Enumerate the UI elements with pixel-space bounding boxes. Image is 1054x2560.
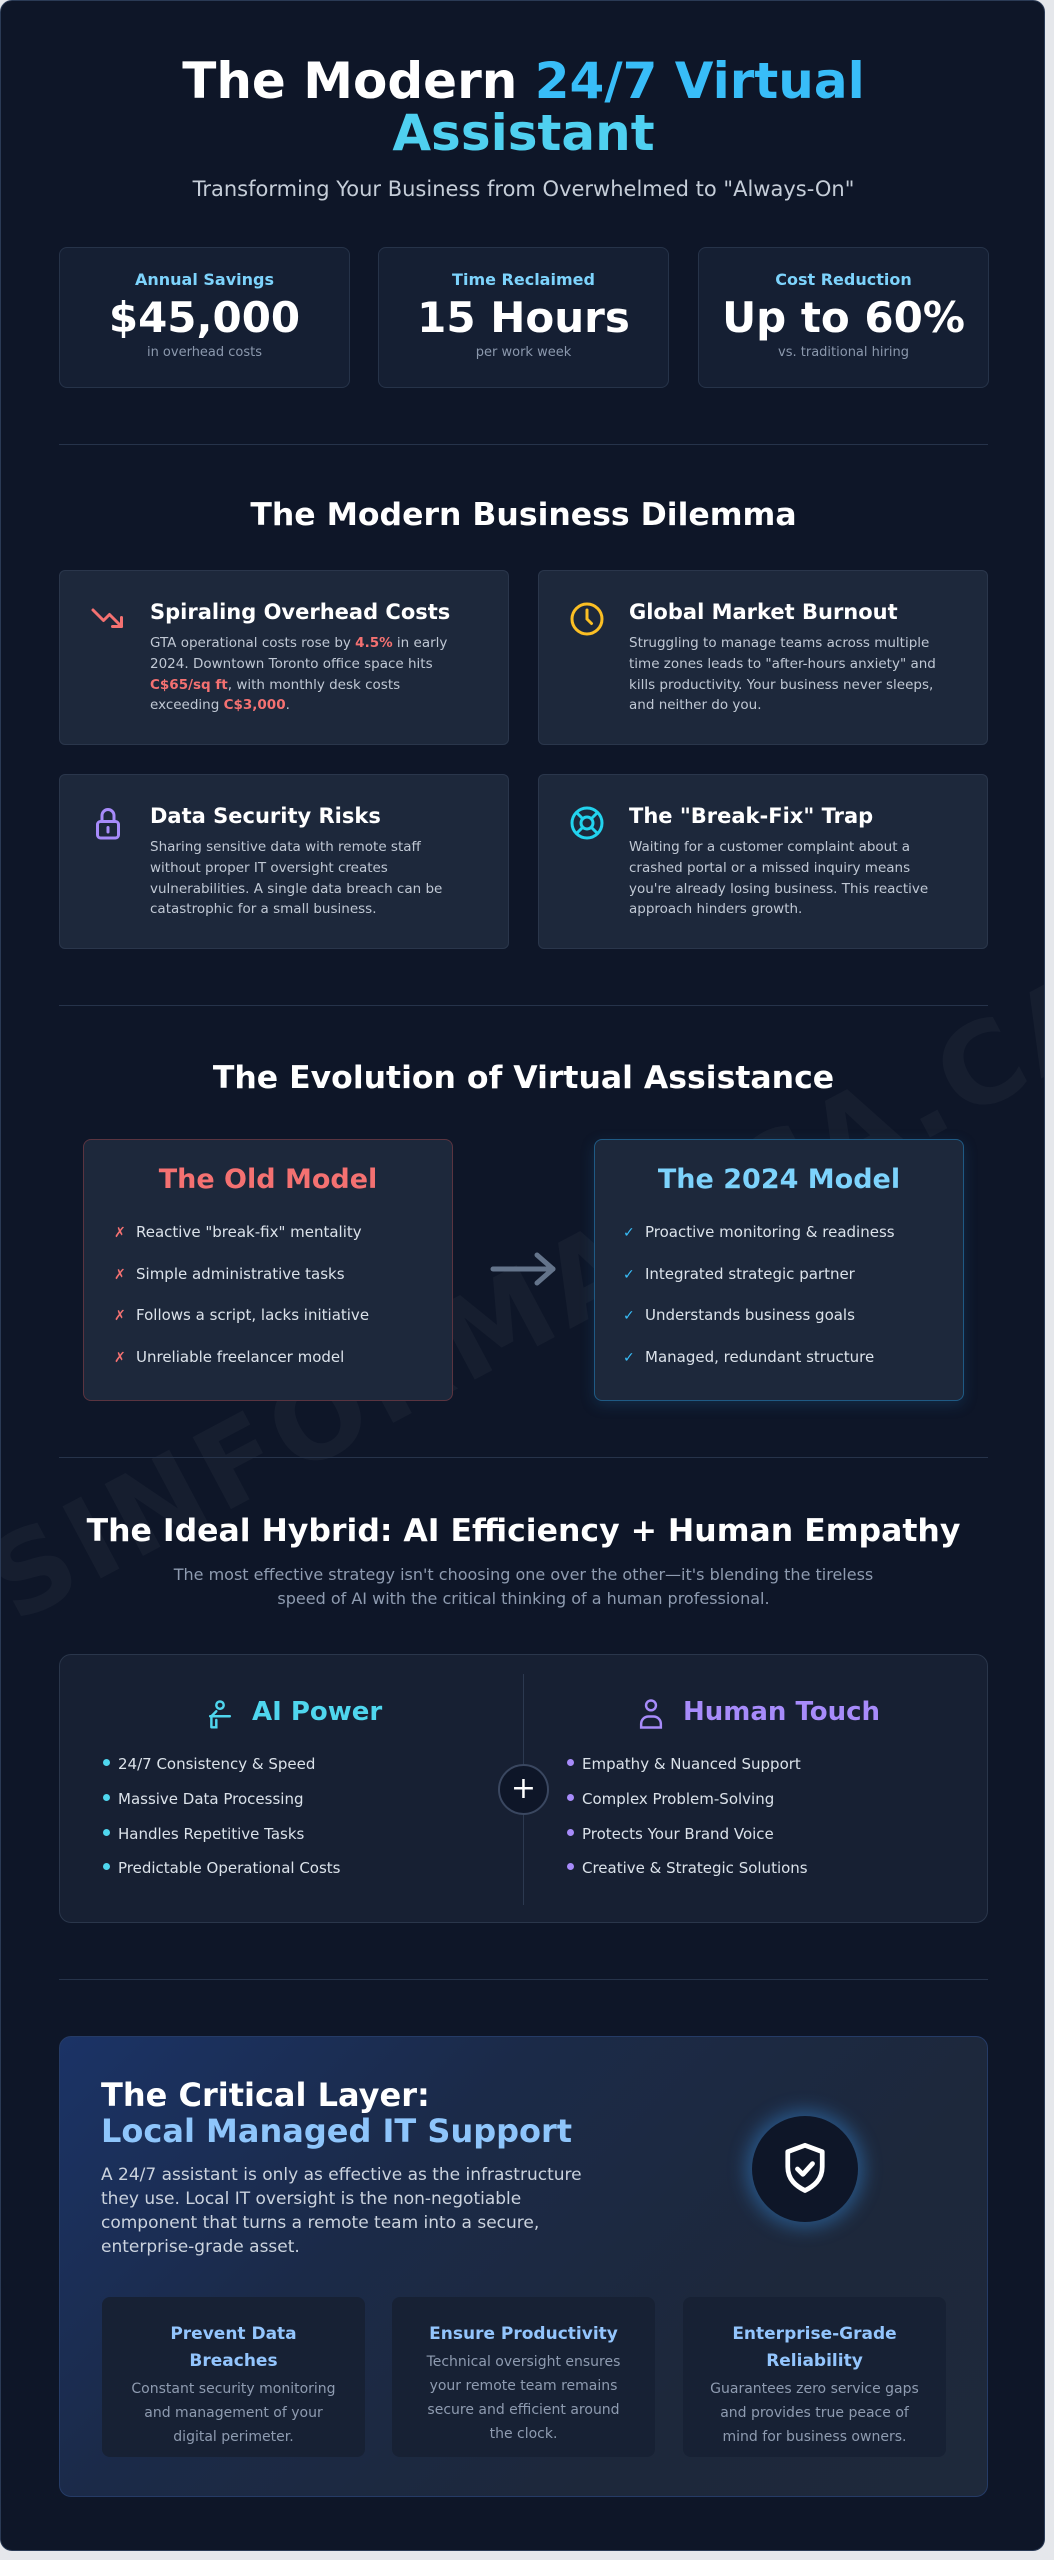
card: reliability (683, 2297, 946, 2457)
panel: burnout: Global Market Burnout (629, 600, 898, 624)
card: productivity (392, 2297, 655, 2457)
panel: hybrid comparison: Predictable Operational Costs (118, 1859, 340, 1877)
heading: hybrid: The Ideal Hybrid: AI Efficiency + Human Empathy (87, 1513, 960, 1549)
panel: hybrid comparison: Creative & Strategic Solutions (582, 1859, 808, 1877)
AI power title: AI Power (252, 1697, 382, 1727)
panel: security: Data Security Risks (150, 804, 381, 828)
card: productivity: Ensure Productivity (429, 2324, 618, 2344)
panel: overhead costs (59, 570, 509, 745)
panel: 2024 model: ✓ (623, 1225, 635, 1241)
card: prevent breaches: Prevent Data Breaches (170, 2324, 297, 2371)
card: prevent breaches (102, 2297, 365, 2457)
panel: break-fix: The "Break-Fix" Trap (629, 804, 873, 828)
stat: cost reduction: Cost Reduction (775, 270, 912, 289)
heading: dilemma: The Modern Business Dilemma (250, 497, 797, 533)
panel: 2024 model: Understands business goals (645, 1306, 855, 1324)
panel: 2024 model (594, 1139, 964, 1401)
stat: annual savings: in overhead costs (147, 345, 262, 360)
icon: life buoy (570, 806, 604, 840)
stat: annual savings: Annual Savings (135, 270, 274, 289)
panel: 2024 model: ✓ (623, 1308, 635, 1324)
critical text: A 24/7 assistant is only as effective as the infrastructure they use. Local IT oversight is the non-negotiable component that turns a remote team into a secure, enterprise-grade asset. (101, 2165, 582, 2257)
critical title (101, 2076, 572, 2150)
panel: 2024 model: The 2024 Model (658, 1164, 900, 1195)
critical title: The Critical Layer: (101, 2076, 430, 2114)
hybrid subtitle: speed of AI with the critical thinking of a human professional. (277, 1589, 770, 1608)
stat: annual savings: $45,000 (109, 293, 300, 342)
arrow (490, 1252, 556, 1286)
stat: time reclaimed (378, 247, 669, 388)
heading: evolution: The Evolution of Virtual Assistance (213, 1060, 834, 1096)
panel: 2024 model: ✓ (623, 1350, 635, 1366)
hybrid subtitle (174, 1565, 873, 1608)
panel: old model: Unreliable freelancer model (136, 1348, 344, 1366)
stat: time reclaimed: per work week (476, 345, 571, 360)
panel: 2024 model: Integrated strategic partner (645, 1265, 855, 1283)
panel: old model: ✗ (114, 1308, 126, 1324)
panel: hybrid comparison: Complex Problem-Solving (582, 1790, 774, 1808)
stat: cost reduction: vs. traditional hiring (778, 345, 909, 360)
panel: burnout (538, 570, 988, 745)
stat: time reclaimed: 15 Hours (417, 293, 630, 342)
panel: burnout: Struggling to manage teams across multiple time zones leads to "after-hours anxiety" and kills productivity. Your business never sleeps, and neither do you. (629, 635, 936, 713)
card: reliability: Guarantees zero service gaps and provides true peace of mind for business owners. (710, 2381, 919, 2445)
panel: old model (83, 1139, 453, 1401)
panel: old model: Reactive "break-fix" mentality (136, 1223, 362, 1241)
panel: 2024 model: Proactive monitoring & readiness (645, 1223, 895, 1241)
panel: old model: ✗ (114, 1267, 126, 1283)
card: productivity: Technical oversight ensures your remote team remains secure and efficient around the clock. (427, 2354, 620, 2442)
icon: lock (96, 808, 120, 840)
panel: security: Sharing sensitive data with remote staff without proper IT oversight creates vulnerabilities. A single data breach can be catastrophic for a small business. (150, 839, 442, 917)
panel: old model: ✗ (114, 1350, 126, 1366)
stat: time reclaimed: Time Reclaimed (452, 270, 595, 289)
panel: hybrid comparison: Protects Your Brand Voice (582, 1825, 774, 1843)
panel: hybrid comparison: Handles Repetitive Tasks (118, 1825, 304, 1843)
panel: overhead costs: GTA operational costs rose by 4.5% in early 2024. Downtown Toronto office space hits C$65/sq ft, with monthly desk costs exceeding C$3,000. (150, 635, 447, 713)
panel: hybrid comparison: 24/7 Consistency & Speed (118, 1755, 315, 1773)
panel: 2024 model: ✓ (623, 1267, 635, 1283)
icon: trending down (91, 608, 124, 628)
panel: hybrid comparison: Empathy & Nuanced Support (582, 1755, 801, 1773)
stat: cost reduction: Up to 60% (722, 293, 965, 342)
panel: critical layer (59, 2036, 988, 2497)
title (182, 52, 865, 162)
subtitle: Transforming Your Business from Overwhelmed to "Always-On" (193, 177, 854, 201)
card: prevent breaches: Constant security monitoring and management of your digital perimeter. (131, 2381, 336, 2445)
panel: break-fix: Waiting for a customer complaint about a crashed portal or a missed inquiry means you're already losing business. This reactive approach hinders growth. (629, 839, 928, 917)
panel: security (59, 774, 509, 949)
human touch title: Human Touch (683, 1697, 880, 1727)
stat: annual savings (59, 247, 350, 388)
panel: old model: The Old Model (159, 1164, 377, 1195)
card: reliability: Enterprise-Grade Reliability (732, 2324, 897, 2371)
panel: old model: Simple administrative tasks (136, 1265, 345, 1283)
icon: shield (752, 2116, 858, 2222)
title: Assistant (392, 104, 655, 162)
panel: hybrid comparison (59, 1654, 988, 1923)
icon: plus (498, 1764, 549, 1815)
title: The Modern 24/7 Virtual (182, 52, 865, 110)
icon: AI (208, 1700, 232, 1728)
icon: plus: + (511, 1771, 536, 1806)
panel: overhead costs: Spiraling Overhead Costs (150, 600, 450, 624)
icon: clock (570, 602, 604, 636)
stat: cost reduction (698, 247, 989, 388)
panel: old model: ✗ (114, 1225, 126, 1241)
icon: human (640, 1699, 662, 1729)
panel: 2024 model: Managed, redundant structure (645, 1348, 874, 1366)
panel: hybrid comparison: Massive Data Processing (118, 1790, 304, 1808)
critical title: Local Managed IT Support (101, 2112, 572, 2150)
panel: break-fix (538, 774, 988, 949)
panel: old model: Follows a script, lacks initiative (136, 1306, 369, 1324)
hybrid subtitle: The most effective strategy isn't choosing one over the other—it's blending the tireless (174, 1565, 873, 1584)
